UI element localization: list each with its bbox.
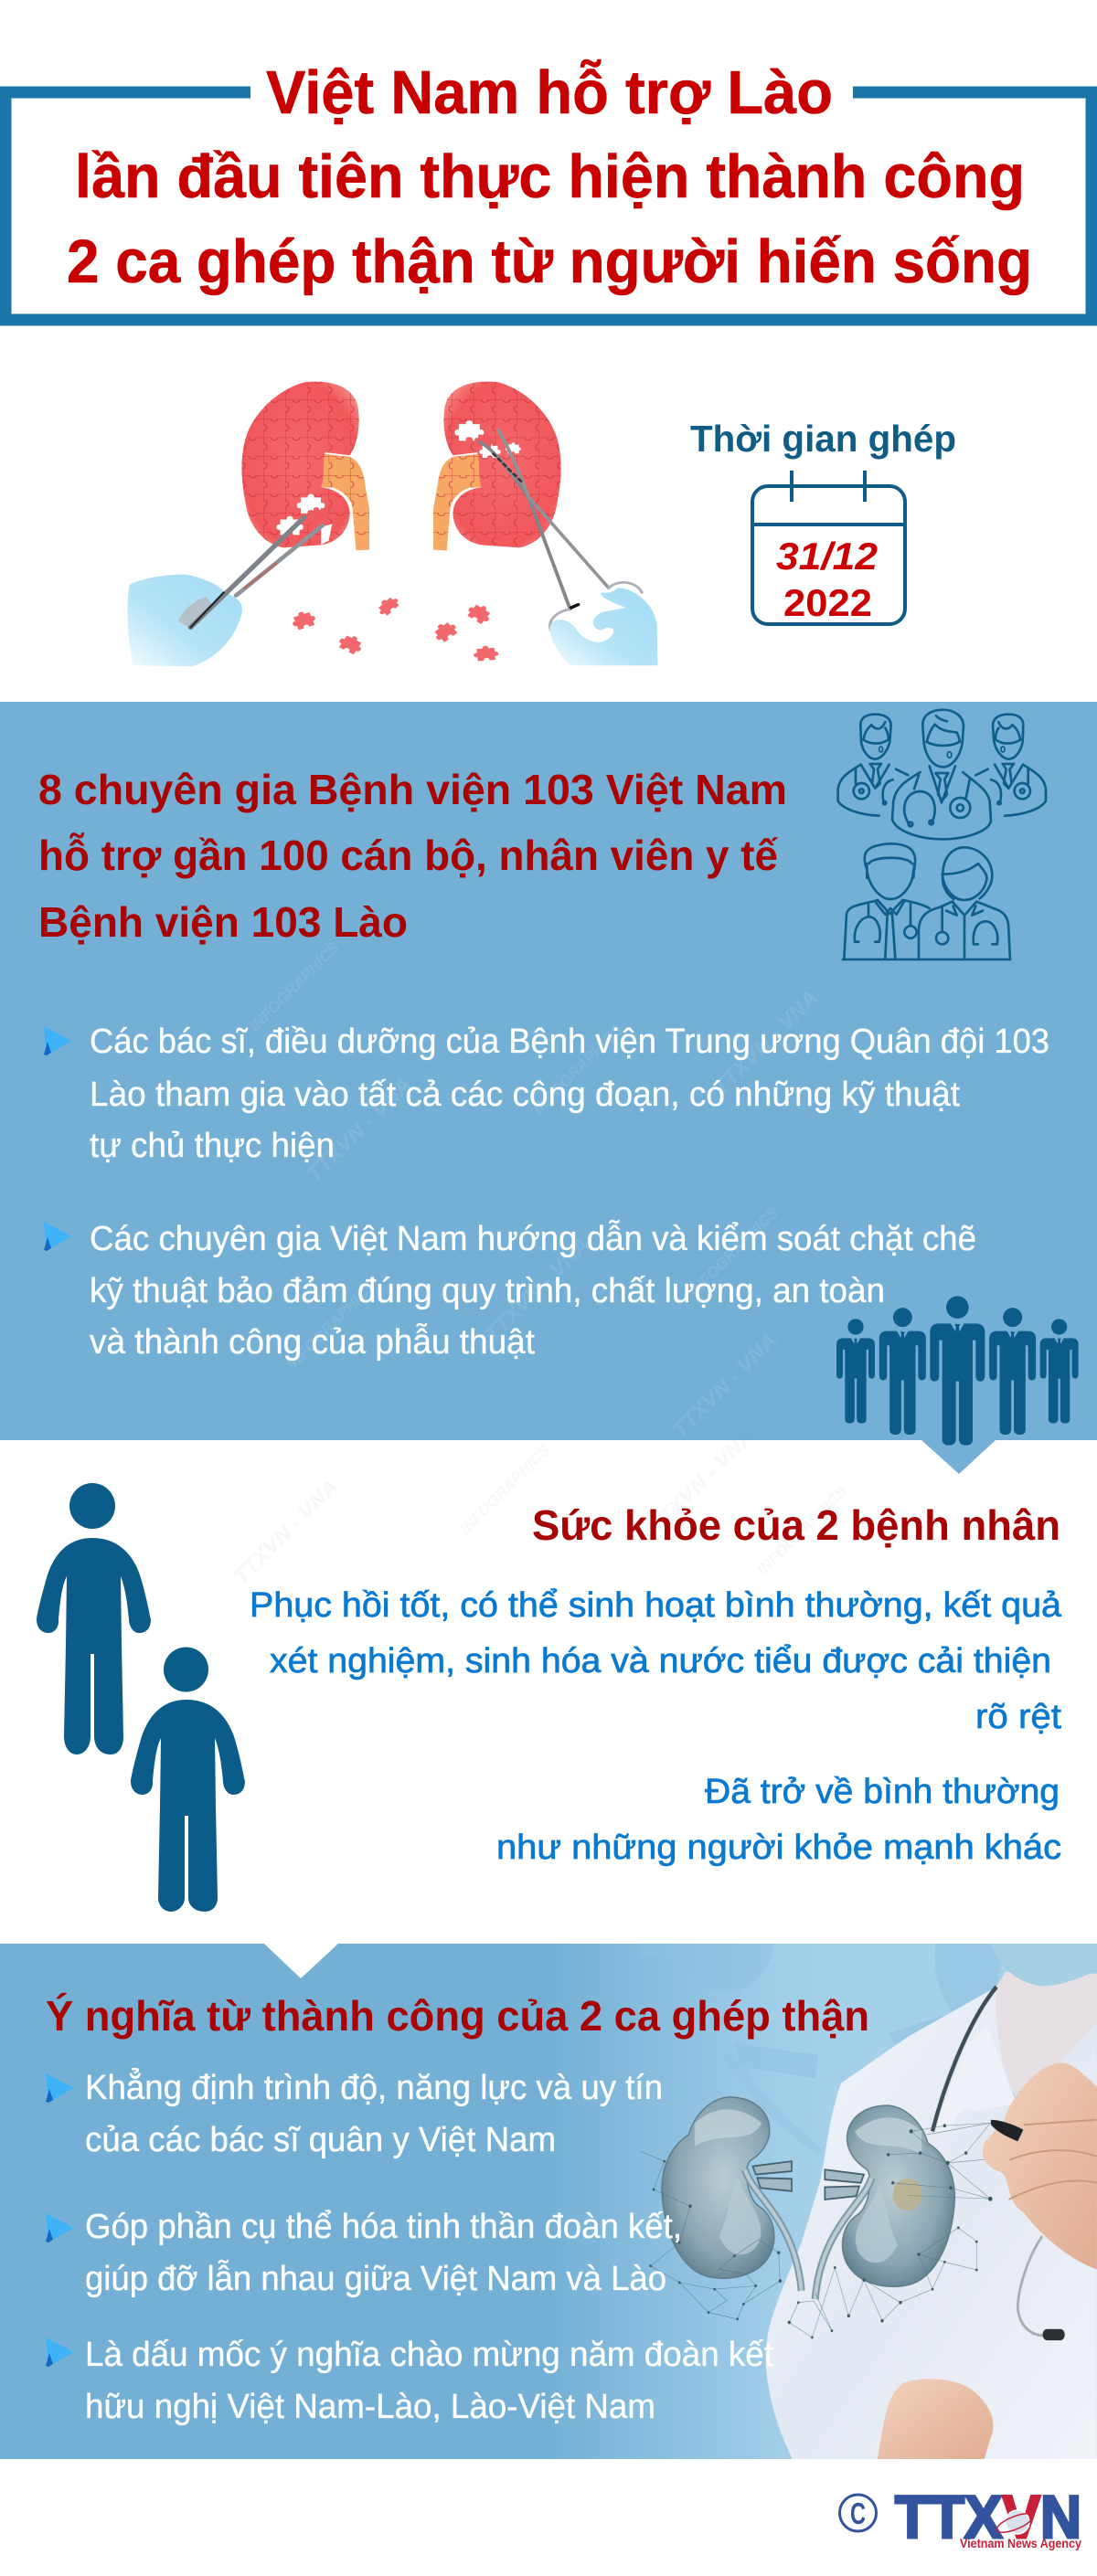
loose puzzle pieces: [289, 594, 499, 662]
item 1 text: [85, 2067, 663, 2159]
recovery text: Phục hồi tốt, có thể sinh hoạt bình thường, kết quả: [250, 1586, 1062, 1625]
heading: hỗ trợ gần 100 cán bộ, nhân viên y tế: [38, 832, 778, 879]
item 2 text: giúp đỡ lẫn nhau giữa Việt Nam và Lào: [85, 2259, 666, 2298]
panel: experts support: [0, 702, 1097, 1474]
icon: bullet arrow: [46, 2073, 73, 2103]
heading: Ý nghĩa từ thành công của 2 ca ghép thận: [46, 1992, 869, 2040]
item 1: [46, 2067, 663, 2159]
title line 2: lần đầu tiên thực hiện thành công: [75, 143, 1025, 211]
icon: bullet arrow: [46, 2213, 73, 2242]
icon: copyright mark: C: [850, 2496, 866, 2530]
bullet 2 text: [90, 1219, 976, 1362]
title line 3: 2 ca ghép thận từ người hiến sống: [67, 228, 1032, 296]
item 3 text: Là dấu mốc ý nghĩa chào mừng năm đoàn kết: [85, 2336, 773, 2374]
left kidney: [242, 382, 369, 550]
item 3 text: [85, 2336, 773, 2426]
watermarks: [229, 1425, 850, 1589]
coat: [766, 1987, 1097, 2459]
right glove: [549, 588, 657, 665]
item 3: [46, 2336, 773, 2426]
illustration: kidney puzzle surgery: [127, 382, 657, 666]
bullet 2 text: kỹ thuật bảo đảm đúng quy trình, chất lượng, an toàn: [90, 1272, 885, 1310]
icon: bullet arrow: [46, 2337, 73, 2367]
watermarks: [246, 938, 824, 1443]
mask: [990, 1944, 1097, 1986]
watermarks: INFOGRAPHICS: [246, 938, 343, 1035]
title panel: [5, 58, 1092, 320]
icon: bullet arrow: [44, 1026, 71, 1055]
pen: [991, 2120, 1023, 2141]
watermarks: TTXVN - VNA: [480, 1233, 595, 1347]
photo: doctor with kidney sketch: [640, 1944, 1097, 2459]
heading: Bệnh viện 103 Lào: [38, 898, 408, 946]
icon: globe: [995, 2510, 1035, 2536]
item 3 text: hữu nghị Việt Nam-Lào, Lào-Việt Nam: [85, 2388, 655, 2426]
normal state text: [496, 1773, 1061, 1867]
normal state text: Đã trở về bình thường: [705, 1773, 1060, 1811]
item 2: [46, 2208, 682, 2298]
left tweezers: [178, 517, 323, 628]
heading: [38, 766, 787, 946]
recovery text: rõ rệt: [975, 1698, 1061, 1736]
bullet 1 text: Các bác sĩ, điều dưỡng của Bệnh viện Trung ương Quân đội 103: [90, 1023, 1049, 1061]
missing puzzle holes: [276, 420, 521, 545]
panel: patients' health: [37, 1425, 1062, 1912]
panel background with pointer: [0, 702, 1097, 1474]
sketch kidneys: [662, 2097, 802, 2291]
white pointer notch: [264, 1944, 338, 1978]
icon: tall patient: [37, 1483, 151, 1754]
panel: significance: [0, 1944, 1097, 2459]
tumour spot: [893, 2178, 922, 2210]
icon: medical team: [838, 710, 1046, 959]
icon: group of people: [836, 1296, 1079, 1446]
watermarks: INFOGRAPHICS: [529, 1021, 626, 1118]
held puzzle pieces: [304, 431, 496, 526]
watermarks: INFOGRAPHICS: [456, 1441, 553, 1538]
item 1 text: của các bác sĩ quân y Việt Nam: [85, 2121, 556, 2159]
date day: 31/12: [776, 535, 878, 578]
date block: [690, 418, 956, 624]
watermarks: TTXVN - VNA: [302, 1073, 417, 1187]
wordmark: TTXVN: [895, 2483, 1081, 2550]
panel background: [0, 1944, 1097, 2459]
right kidney: [433, 382, 561, 550]
icon: copyright mark: [839, 2495, 876, 2531]
item 2 text: [85, 2208, 682, 2298]
logo: TTXVN copyright: [839, 2483, 1081, 2550]
lower hand: [878, 2379, 993, 2459]
icon: bullet arrow: [44, 1222, 71, 1251]
bullet 1 text: Lào tham gia vào tất cả các công đoạn, có những kỹ thuật: [90, 1076, 960, 1114]
watermarks: TTXVN - VNA: [708, 986, 824, 1100]
bullet 1 text: [90, 1023, 1049, 1165]
right forceps: [479, 430, 642, 633]
date year: 2022: [783, 581, 872, 624]
bullet 1 text: tự chủ thực hiện: [90, 1127, 335, 1165]
watermarks: TTXVN - VNA: [644, 1425, 760, 1539]
recovery text: xét nghiệm, sinh hóa và nước tiểu được cải thiện: [270, 1642, 1051, 1680]
icon: short patient: [131, 1647, 245, 1912]
icon: calendar: [752, 471, 905, 624]
item 2 text: Góp phần cụ thể hóa tinh thần đoàn kết,: [85, 2208, 682, 2246]
title frame: [5, 92, 1092, 320]
network lines: [640, 2123, 990, 2337]
stethoscope tube: [932, 1987, 996, 2131]
agency name: Vietnam News Agency: [960, 2537, 1081, 2550]
bullet 2 text: Các chuyên gia Việt Nam hướng dẫn và kiểm soát chặt chẽ: [90, 1219, 976, 1258]
faint background kidney: [640, 1944, 1006, 2157]
bullet 1: [44, 1023, 1049, 1165]
watermarks: TTXVN - VNA: [667, 1329, 783, 1443]
item 1 text: Khẳng định trình độ, năng lực và uy tín: [85, 2067, 663, 2107]
title line 1: Việt Nam hỗ trợ Lào: [266, 58, 833, 127]
watermarks: INFOGRAPHICS: [685, 1203, 782, 1300]
watermarks: INFOGRAPHICS: [753, 1482, 850, 1579]
normal state text: như những người khỏe mạnh khác: [496, 1829, 1061, 1867]
heading: Sức khỏe của 2 bệnh nhân: [532, 1501, 1060, 1549]
heading: 8 chuyên gia Bệnh viện 103 Việt Nam: [38, 766, 787, 813]
writing hand: [983, 2062, 1097, 2269]
recovery text: [250, 1586, 1062, 1736]
neck: [996, 1972, 1097, 2100]
date label: Thời gian ghép: [690, 418, 956, 460]
watermarks: INFOGRAPHICS: [282, 1277, 379, 1373]
watermarks: TTXVN - VNA: [229, 1475, 344, 1589]
bullet 2: [44, 1219, 976, 1362]
left glove: [127, 575, 242, 666]
bullet 2 text: và thành công của phẫu thuật: [90, 1322, 535, 1362]
